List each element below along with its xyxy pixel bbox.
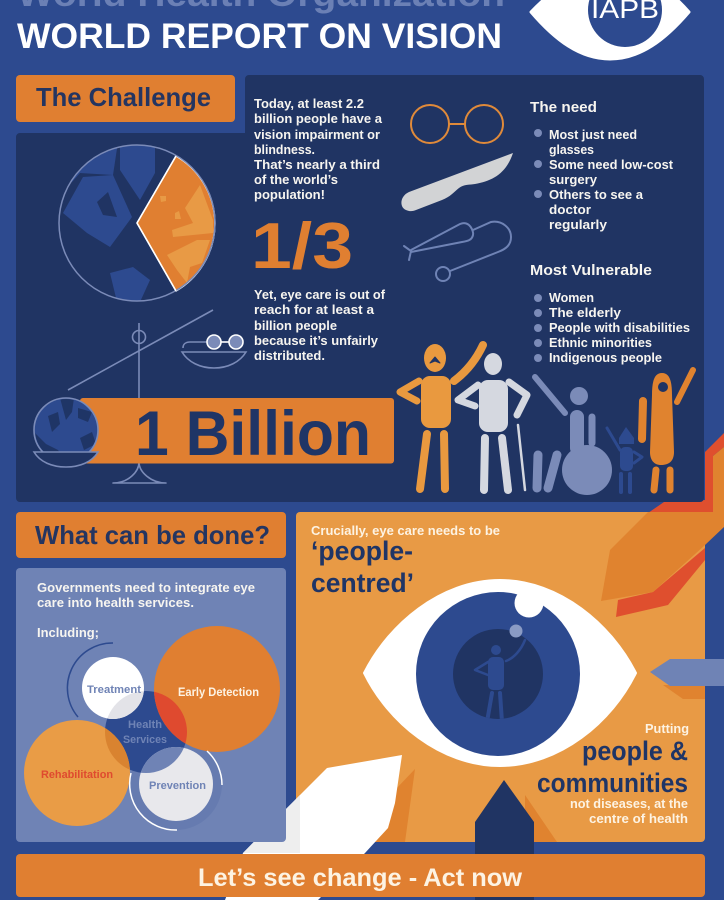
arrow: bottom left white [225, 755, 415, 900]
heading: people-centred: centred’ [311, 568, 414, 598]
person in pupil [475, 640, 525, 722]
text block: most vulnerable [530, 262, 690, 365]
heading: what can be done: What can be done? [35, 520, 270, 550]
illustration: elderly man with cane [458, 353, 527, 490]
text: governments [37, 581, 255, 640]
text block: intro: vision impairment or [254, 128, 380, 142]
venn labels: Early Detection [178, 687, 259, 699]
text block: most vulnerable: People with disabilities [549, 321, 690, 335]
icon: scalpel [401, 153, 513, 211]
text block: the need: doctor [549, 203, 591, 217]
illustration: child [607, 427, 642, 492]
text block: out of reach: because it’s unfairly [254, 334, 378, 348]
text block: the need: Some need low-cost [549, 158, 674, 172]
text block: intro [254, 97, 383, 202]
icon: stethoscope [404, 222, 511, 281]
header title [17, 0, 505, 56]
text: crucially eye care: Crucially, eye care needs to be [311, 524, 500, 538]
text block: intro: Today, at least 2.2 [254, 97, 364, 111]
text block: people and communities: not diseases, at the [570, 797, 688, 811]
text block: out of reach: billion people [254, 319, 337, 333]
text block: most vulnerable: The elderly [549, 306, 621, 320]
text block: out of reach [254, 288, 386, 363]
icon: globe with one third highlighted [59, 142, 215, 302]
text block: most vulnerable: Women [549, 291, 594, 305]
heading: people-centred [311, 536, 414, 598]
heading: The Challenge [16, 75, 235, 122]
text: governments: care into health services. [37, 596, 194, 610]
call to action bar [16, 854, 705, 897]
illustration: man in turban [400, 344, 483, 489]
text block: intro: blindness. [254, 143, 315, 157]
illustration: wheelchair user [535, 377, 612, 495]
text block: people and communities: people & [582, 736, 688, 766]
statistic: 1/3: 1/3 [251, 209, 353, 282]
text block: people and communities: communities [537, 768, 688, 798]
text block: the need: The need [530, 99, 597, 116]
arrow: top right orange and red [601, 447, 724, 617]
call to action bar: Let’s see change - Act now [198, 864, 523, 892]
panel: health services diagram [16, 568, 286, 842]
panel: the challenge background [16, 75, 704, 502]
text block: intro: That’s nearly a third [254, 158, 380, 172]
text block: out of reach: reach for at least a [254, 303, 375, 317]
heading: The Challenge: The Challenge [36, 82, 211, 112]
text block: most vulnerable: Most Vulnerable [530, 262, 652, 279]
decorative arrow: top right [648, 433, 724, 513]
text block: most vulnerable: Indigenous people [549, 351, 662, 365]
text block: out of reach: distributed. [254, 349, 325, 363]
heading: what can be done [16, 512, 286, 558]
arrow: bottom orange and navy house [475, 780, 557, 900]
text block: intro: billion people have a [254, 112, 383, 126]
icon: large eye with person [364, 580, 636, 766]
icon: small globe on scale pan [34, 398, 98, 467]
arrow: right pointing blue [650, 659, 724, 699]
venn labels: Health [128, 719, 162, 731]
text block: out of reach: Yet, eye care is out of [254, 288, 386, 302]
text block: people and communities: centre of health [589, 812, 688, 826]
heading: people-centred: ‘people- [311, 536, 413, 566]
text: governments: Including; [37, 626, 99, 640]
panel: people-centred [296, 512, 705, 842]
text block: people and communities: Putting [645, 722, 689, 736]
text block: intro: population! [254, 188, 325, 202]
illustration: woman in veil [642, 370, 693, 490]
text block: the need: Most just need [549, 128, 637, 142]
venn labels: Services [123, 734, 167, 746]
icon: glasses [411, 105, 503, 143]
text block: intro: of the world’s [254, 173, 338, 187]
text block: the need: surgery [549, 173, 597, 187]
venn diagram [24, 626, 280, 830]
venn labels: Prevention [149, 780, 206, 792]
venn labels: Rehabilitation [41, 769, 113, 781]
text block: the need: Others to see a [549, 188, 644, 202]
venn labels [41, 684, 259, 792]
statistic banner: 1 Billion: 1 Billion [135, 399, 371, 469]
text: governments: Governments need to integrate eye [37, 581, 255, 595]
text block: the need: glasses [549, 143, 594, 157]
chart: balance scale [68, 310, 246, 483]
text block: the need [530, 99, 674, 232]
icon: IAPB eye logo [531, 0, 689, 59]
text block: the need: regularly [549, 218, 607, 232]
venn labels: Treatment [87, 684, 141, 696]
header title: WORLD REPORT ON VISION [17, 17, 502, 56]
text block: people and communities [537, 722, 689, 826]
text block: most vulnerable: Ethnic minorities [549, 336, 652, 350]
